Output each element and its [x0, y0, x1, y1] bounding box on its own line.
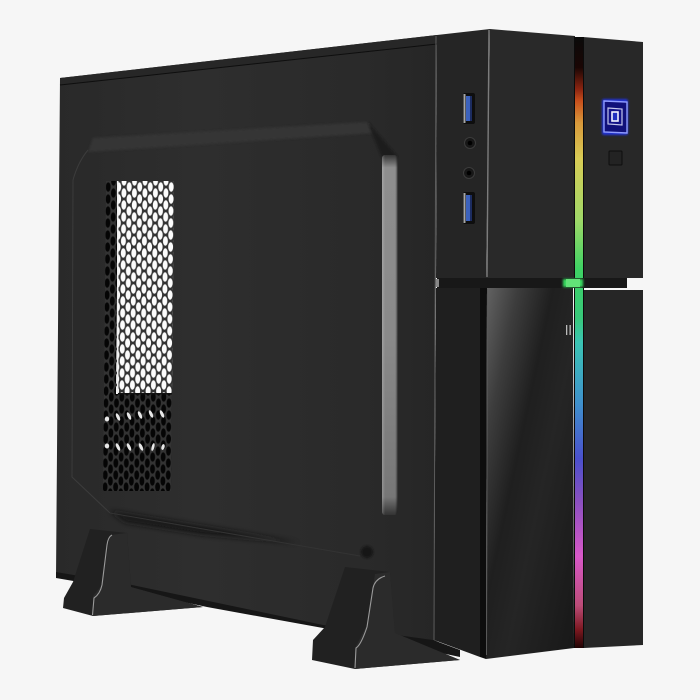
USB port upper — [463, 93, 475, 124]
panel: front left column lower — [434, 288, 480, 657]
audio jack 2 — [464, 168, 474, 178]
light leaking through lower mesh — [105, 410, 165, 451]
panel: front left column upper — [436, 29, 490, 278]
panel: front face upper — [486, 29, 575, 278]
highlight band on the panel's right flange — [382, 155, 398, 515]
reset button — [609, 151, 622, 165]
right foot — [312, 567, 460, 669]
door gap — [480, 288, 487, 659]
door slot marks — [566, 325, 571, 335]
LED strip — [574, 37, 584, 648]
panel: front right lower — [584, 290, 643, 648]
panel: front right upper — [583, 37, 643, 278]
seam: light vertical edges — [434, 30, 489, 655]
bottom rail — [56, 572, 460, 657]
left foot — [63, 529, 203, 616]
power button — [602, 99, 628, 135]
USB port lower — [463, 192, 475, 224]
shelf band — [436, 278, 627, 288]
panel: case side — [56, 35, 460, 657]
top edge strip — [60, 35, 437, 85]
audio jack 1 — [464, 138, 476, 148]
ventilation mesh — [103, 181, 174, 491]
panel: glossy door — [486, 288, 574, 659]
recessed side panel — [72, 122, 398, 558]
